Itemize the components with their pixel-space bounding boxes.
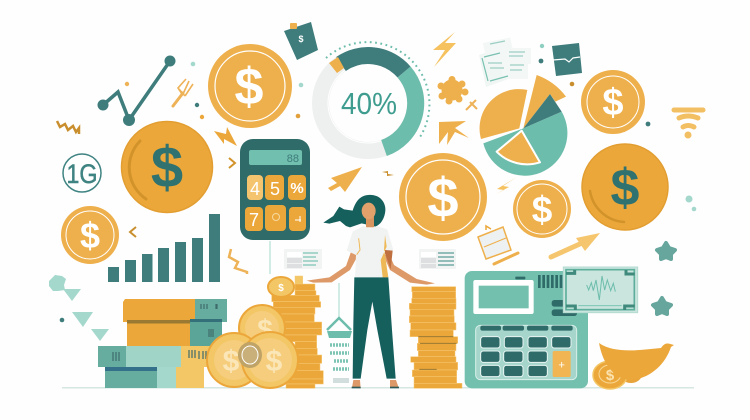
donut chart: 40%: 40% [341, 86, 397, 121]
line chart icon [98, 56, 176, 126]
coin: bottom right pair: $ [606, 367, 615, 384]
calculator: dark [240, 139, 310, 240]
shirt [347, 226, 393, 277]
thin lines [270, 241, 339, 320]
donut chart: 40% [320, 42, 429, 150]
coins group: $ [278, 283, 284, 294]
coin: center: $ [427, 166, 459, 229]
icon: lightning bolt top [433, 32, 456, 67]
trousers [353, 277, 396, 379]
icon: cursor arrow [328, 167, 362, 192]
coin stack left [272, 276, 323, 388]
coins group [207, 277, 298, 388]
arrow up right [551, 233, 600, 257]
coin: lower left: $ [80, 215, 100, 256]
icon: shopping basket with receipt [327, 318, 352, 383]
arms [307, 250, 357, 283]
box stack [98, 299, 227, 388]
coin stack right [409, 287, 462, 388]
face [362, 203, 376, 219]
tag icon: note [284, 22, 318, 60]
icon: squiggle bar [229, 249, 247, 274]
icon: gold bowl [599, 343, 674, 380]
coins group: $ [257, 314, 273, 345]
calculator: dark: % [290, 180, 304, 197]
decorative dots [60, 44, 696, 322]
coin: top left: $ [235, 58, 264, 116]
calculator: dark: 5 [270, 179, 280, 199]
coin: bottom right pair [593, 361, 642, 389]
icon: small sprig [466, 100, 477, 110]
coin: upper right: $ [602, 82, 624, 124]
calculator: teal [465, 271, 588, 388]
icon: lightning bolt mid [496, 177, 517, 194]
coin: large teal dollar [122, 122, 212, 212]
coins group: $ [266, 345, 283, 378]
hair [323, 195, 385, 227]
neck [366, 217, 374, 227]
calculator: dark: 4 [250, 179, 260, 199]
bar chart [108, 214, 220, 282]
icon: gear blob [438, 76, 468, 104]
documents [479, 37, 531, 87]
icon: teal stars [653, 243, 675, 314]
document card left [284, 249, 322, 269]
badge: 1G: 1G [66, 159, 98, 189]
coin: large right: $ [611, 159, 640, 217]
icon: clipboard note [478, 226, 518, 264]
pie chart [480, 75, 567, 176]
coin: middle right: $ [532, 189, 553, 230]
icon: wallet chart card [552, 43, 582, 76]
badge: 1G [63, 154, 101, 192]
icon: chevron left [130, 227, 136, 237]
coin: center [399, 153, 487, 241]
coin: lower left [61, 206, 119, 264]
icon: squiggle left [57, 121, 79, 134]
icon: small zigzag [382, 171, 394, 176]
coins group: $ [223, 345, 240, 378]
calculator: teal: + [558, 359, 565, 371]
calculator: dark: 88 [287, 153, 299, 165]
icons: teal pins [49, 275, 109, 341]
coin: large right [582, 144, 668, 230]
calculator: dark: 7 [249, 210, 259, 230]
banknote [563, 267, 638, 313]
coin: upper right [581, 70, 645, 134]
icon: double arrow [439, 121, 469, 145]
shoes [352, 380, 361, 388]
coin: large teal dollar: $ [151, 135, 183, 200]
icon: wifi signal [674, 110, 703, 138]
tag icon: note: $ [298, 34, 304, 44]
icon: fork [173, 79, 193, 106]
icon: lightning bolt left [214, 127, 237, 146]
document card right [419, 249, 456, 269]
coin: top left [208, 44, 292, 128]
coin: middle right [513, 180, 571, 238]
figure: woman [307, 195, 435, 388]
icon: chevron [229, 158, 235, 168]
